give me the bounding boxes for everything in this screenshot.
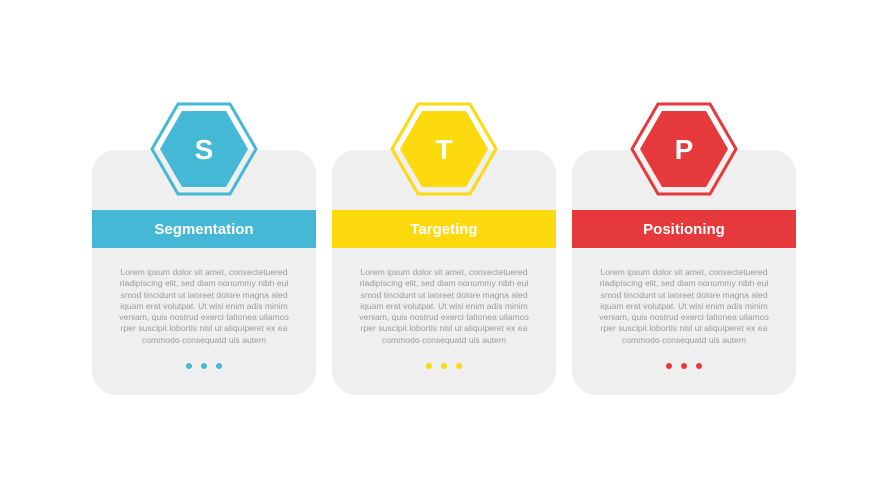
icon: hexagon P <box>630 102 738 196</box>
heading band <box>92 210 316 248</box>
text block: veniam, quis nostrud exerci tationea ullamco <box>599 312 769 322</box>
text block: smod tincidunt ut laoreet dolore magna aled <box>360 290 528 300</box>
card background <box>572 150 796 395</box>
dots <box>666 363 702 369</box>
text block: smod tincidunt ut laoreet dolore magna aled <box>120 290 288 300</box>
text block: iquam erat volutpat. Ut wisi enim adis minim <box>120 301 288 311</box>
panel: segmentation <box>92 102 316 395</box>
text block: commodo consequatd uis autem <box>382 335 506 345</box>
text block: commodo consequatd uis autem <box>622 335 746 345</box>
dots <box>426 363 462 369</box>
heading band: Segmentation <box>154 221 254 238</box>
text block: veniam, quis nostrud exerci tationea ullamco <box>119 312 289 322</box>
text block: rper suscipit lobortis nisl ut aliquiperet ex ea <box>361 323 527 333</box>
text block <box>359 267 529 345</box>
panel: targeting <box>332 102 556 395</box>
text block: iquam erat volutpat. Ut wisi enim adis minim <box>600 301 768 311</box>
text block: Lorem ipsum dolor sit amet, consectetuered <box>600 267 768 277</box>
dots <box>186 363 222 369</box>
text block: veniam, quis nostrud exerci tationea ullamco <box>359 312 529 322</box>
panel: positioning <box>572 102 796 395</box>
icon: hexagon T: T <box>435 134 453 165</box>
icon: hexagon S: S <box>195 134 213 165</box>
text block: smod tincidunt ut laoreet dolore magna aled <box>600 290 768 300</box>
card background <box>332 150 556 395</box>
icon: hexagon S <box>150 102 258 196</box>
text block: iquam erat volutpat. Ut wisi enim adis minim <box>360 301 528 311</box>
icon: hexagon T <box>390 102 498 196</box>
text block: commodo consequatd uis autem <box>142 335 266 345</box>
text block: Lorem ipsum dolor sit amet, consectetuered <box>360 267 528 277</box>
text block: riadipiscing elit, sed diam nonummy nibh eui <box>360 278 528 288</box>
text block: rper suscipit lobortis nisl ut aliquiperet ex ea <box>601 323 767 333</box>
card background <box>92 150 316 395</box>
heading band <box>572 210 796 248</box>
heading band: Positioning <box>643 221 725 238</box>
heading band: Targeting <box>410 221 478 238</box>
text block: riadipiscing elit, sed diam nonummy nibh eui <box>600 278 768 288</box>
text block <box>599 267 769 345</box>
text block: riadipiscing elit, sed diam nonummy nibh eui <box>120 278 288 288</box>
text block <box>119 267 289 345</box>
text block: rper suscipit lobortis nisl ut aliquiperet ex ea <box>121 323 287 333</box>
heading band <box>332 210 556 248</box>
icon: hexagon P: P <box>675 134 693 165</box>
text block: Lorem ipsum dolor sit amet, consectetuered <box>120 267 288 277</box>
